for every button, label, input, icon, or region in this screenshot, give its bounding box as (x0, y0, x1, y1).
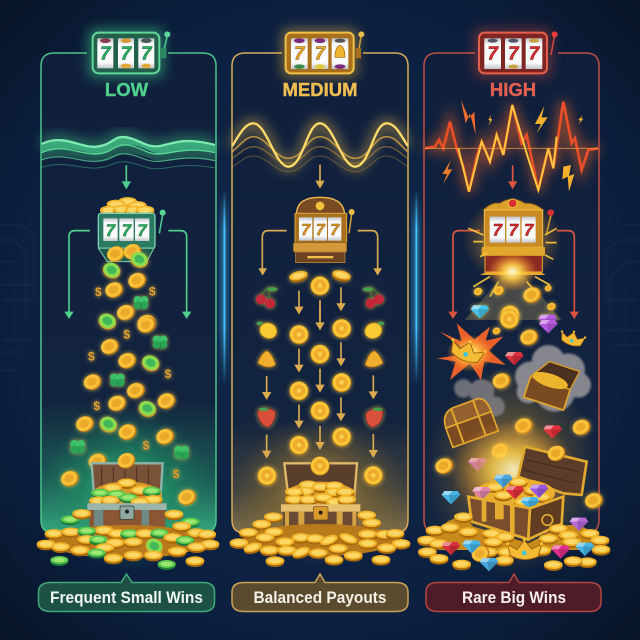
top slot machine low: 7 (141, 43, 153, 64)
caption: rare big wins (426, 574, 601, 612)
coins, clovers and dollars low: $ (93, 399, 100, 413)
top slot machine medium (282, 28, 364, 78)
caption text medium: Balanced Payouts (254, 589, 386, 607)
coins, clovers and dollars low: $ (88, 350, 95, 364)
second slot machine medium: 7 (301, 222, 311, 239)
second slot machine high: 7 (524, 221, 534, 240)
panel glow medium (232, 420, 408, 533)
caption: balanced payouts (232, 574, 408, 612)
top slot machine medium: 7 (294, 43, 306, 64)
caption: frequent small wins (38, 574, 214, 612)
treasure chest high (450, 420, 587, 539)
heading medium: MEDIUM (282, 79, 358, 100)
top slot machine high (474, 28, 558, 78)
panel border high (424, 53, 599, 533)
caption text high: Rare Big Wins (462, 589, 566, 607)
blue glow dividers (221, 190, 419, 385)
glow high (426, 365, 598, 575)
arrows low (64, 165, 191, 319)
top slot machine high: 7 (508, 43, 520, 64)
top slot machine low: 7 (121, 43, 133, 64)
second slot machine high: 7 (509, 221, 519, 240)
treasure chest medium (281, 456, 360, 532)
wave high (425, 102, 598, 192)
top slot machine low: 7 (100, 43, 112, 64)
coins and fruit lower medium (256, 319, 384, 486)
second slot machine low (98, 197, 166, 265)
top slot machine high: 7 (529, 43, 541, 64)
coin pile low (37, 509, 219, 570)
falling coins low (95, 249, 158, 333)
glow medium (235, 415, 405, 565)
top slot machine medium: 7 (315, 43, 327, 64)
second slot machine low: 7 (106, 221, 116, 240)
coin pile medium (230, 511, 410, 567)
caption text low: Frequent Small Wins (50, 589, 203, 607)
second slot machine high: 7 (493, 221, 503, 240)
coins and fruit top medium (256, 269, 384, 308)
top slot machine low (88, 28, 170, 78)
second slot machine low: 7 (122, 221, 132, 240)
second slot machine high (463, 197, 563, 320)
coins, clovers and dollars low (59, 314, 199, 508)
circuit traces left (0, 225, 34, 370)
second slot machine low: 7 (137, 221, 147, 240)
falling coins low: $ (149, 284, 156, 298)
wave medium (232, 123, 408, 172)
panel: low volatility (37, 28, 219, 570)
coins, clovers and dollars low: $ (143, 438, 150, 452)
falling coins low: $ (95, 285, 102, 299)
second slot machine medium: 7 (330, 222, 340, 239)
coins, clovers and dollars low: $ (173, 467, 180, 481)
flying coins and gems upper high (471, 284, 557, 328)
arrows lower medium (262, 306, 378, 459)
arrows high (448, 165, 579, 319)
glow low (42, 410, 212, 570)
explosions, gems and chests middle high (433, 310, 605, 511)
heading low: LOW (105, 79, 149, 100)
lightning bolts high (442, 100, 583, 192)
wave low (42, 137, 215, 169)
panel border low (41, 53, 216, 533)
top slot machine high: 7 (487, 43, 499, 64)
coins, clovers and dollars low: $ (123, 328, 130, 342)
coins, clovers and dollars low: $ (165, 367, 172, 381)
heading high: HIGH (490, 79, 536, 100)
second slot machine medium: 7 (316, 222, 326, 239)
panel glow low (41, 400, 216, 533)
panel: medium volatility (230, 28, 410, 567)
panel: high volatility (417, 28, 610, 575)
treasure chest low (87, 450, 167, 531)
panel border medium (232, 53, 408, 533)
second slot machine medium (293, 197, 355, 263)
gold pile and jewels high (417, 512, 610, 571)
circuit traces right (604, 225, 640, 345)
arrows medium (258, 165, 382, 320)
